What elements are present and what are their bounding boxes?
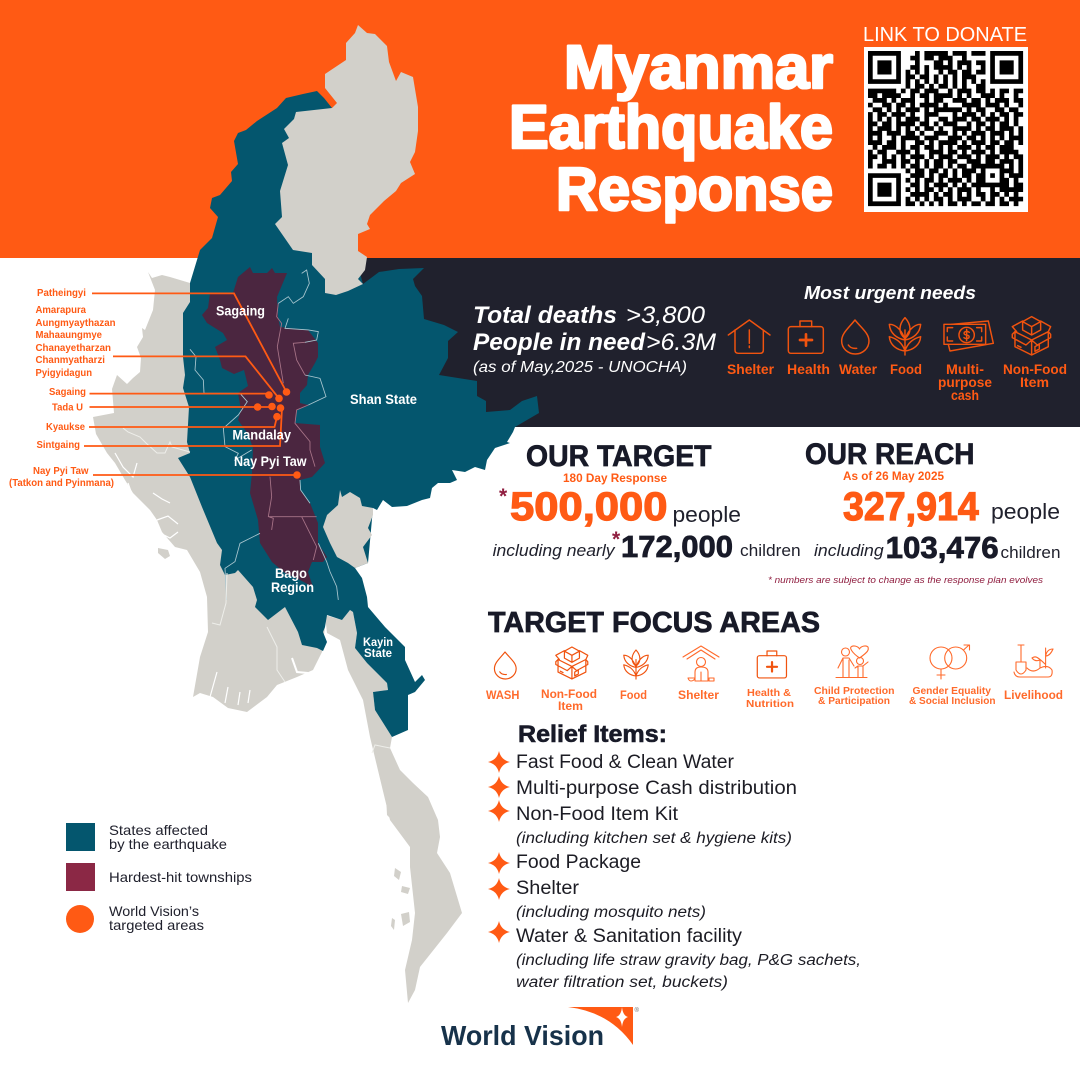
target heading: OUR TARGET bbox=[526, 440, 712, 473]
focus area labels: WASH bbox=[486, 690, 519, 702]
legend swatch: affected states bbox=[66, 823, 95, 851]
icon: food bbox=[889, 318, 921, 355]
reach people unit: people bbox=[991, 499, 1060, 524]
list text: Non-Food Item Kit bbox=[516, 804, 679, 825]
township labels: Aungmyaythazan bbox=[36, 318, 116, 329]
legend text: World Vision’s bbox=[109, 903, 199, 919]
focus area labels: Item bbox=[558, 701, 583, 713]
reach children unit: children bbox=[1000, 543, 1060, 562]
township labels: Chanayetharzan bbox=[36, 343, 111, 354]
panel: our target bbox=[493, 440, 801, 564]
township labels: Sagaing bbox=[49, 387, 86, 398]
region labels: Bago bbox=[275, 565, 307, 581]
focus area labels: & Participation bbox=[818, 696, 890, 707]
township labels: Chanmyatharzi bbox=[36, 355, 105, 366]
list text: Fast Food & Clean Water bbox=[516, 752, 735, 773]
QR code bbox=[864, 47, 1028, 212]
headline statistics: (as of May,2025 - UNOCHA) bbox=[473, 359, 687, 376]
headline statistics: Total deaths bbox=[473, 302, 617, 329]
orange header band bbox=[0, 0, 1080, 258]
map: southern peninsula bbox=[325, 610, 462, 1003]
township labels: Nay Pyi Taw bbox=[33, 466, 89, 477]
list text: water filtration set, buckets) bbox=[516, 974, 728, 991]
icon: shelter bbox=[728, 320, 770, 353]
target asterisk: * bbox=[499, 485, 508, 508]
map: western border lines bbox=[123, 428, 390, 753]
headline statistics: >6.3M bbox=[646, 329, 716, 356]
needs labels: Health bbox=[787, 362, 830, 377]
region labels: Kayin bbox=[363, 637, 393, 649]
needs heading: Most urgent needs bbox=[804, 283, 976, 303]
needs labels: Water bbox=[839, 362, 878, 377]
focus area labels: Nutrition bbox=[746, 698, 794, 710]
region labels: Mandalay bbox=[232, 426, 291, 442]
panel: our reach bbox=[805, 438, 1060, 565]
legend text: targeted areas bbox=[109, 917, 204, 933]
list text: Water & Sanitation facility bbox=[516, 926, 743, 947]
township labels: Amarapura bbox=[36, 305, 86, 316]
donate label: LINK TO DONATE bbox=[863, 24, 1027, 46]
icon: water bbox=[842, 320, 869, 354]
heading: target focus areas: TARGET FOCUS AREAS bbox=[488, 607, 820, 639]
target people unit: people bbox=[672, 502, 741, 527]
target subheading: 180 Day Response bbox=[563, 473, 667, 485]
list text: (including mosquito nets) bbox=[516, 904, 706, 921]
list text: (including life straw gravity bag, P&G sachets, bbox=[516, 952, 861, 969]
logo wordmark: World Vision bbox=[441, 1020, 604, 1051]
icon: focus shelter bbox=[683, 646, 719, 681]
focus area labels: Gender Equality bbox=[912, 686, 991, 697]
needs labels: Item bbox=[1020, 375, 1049, 390]
needs labels: cash bbox=[951, 388, 979, 403]
target children unit: children bbox=[740, 541, 801, 560]
panel: focus area icons bbox=[486, 645, 1063, 713]
map: northern Kachin state bbox=[275, 25, 418, 295]
region labels: State bbox=[364, 648, 392, 660]
logo star bbox=[616, 1007, 628, 1027]
focus area labels: Non-Food bbox=[541, 689, 597, 701]
headline statistics bbox=[473, 302, 716, 376]
township labels: (Tatkon and Pyinmana) bbox=[9, 478, 114, 489]
footnote: * numbers are subject to change as the response plan evolves bbox=[768, 575, 1043, 586]
target children asterisk: * bbox=[612, 528, 621, 551]
legend swatch: hardest-hit bbox=[66, 863, 95, 891]
focus area labels: Livelihood bbox=[1004, 690, 1063, 702]
icon: health bbox=[788, 321, 823, 353]
World Vision logo bbox=[441, 1007, 640, 1051]
region labels: Sagaing bbox=[216, 304, 265, 318]
needs labels: purpose bbox=[938, 375, 992, 390]
panel: relief items bbox=[488, 721, 861, 991]
headline statistics: >3,800 bbox=[626, 302, 706, 329]
reach heading: OUR REACH bbox=[805, 438, 974, 471]
township labels bbox=[9, 288, 116, 489]
needs labels: Non-Food bbox=[1003, 362, 1067, 377]
region labels: Nay Pyi Taw bbox=[234, 453, 307, 469]
township labels: Sintgaing bbox=[36, 440, 80, 451]
map of Myanmar bbox=[9, 25, 539, 1003]
icon: focus health bbox=[757, 651, 786, 678]
legend marker: targeted areas bbox=[66, 905, 94, 933]
needs labels: Food bbox=[890, 362, 922, 377]
township labels: Tada U bbox=[52, 402, 83, 414]
panel: most urgent needs bbox=[727, 283, 1067, 403]
icon: focus non-food item bbox=[556, 647, 588, 679]
headline statistics: People in need bbox=[473, 329, 646, 356]
region labels: Region bbox=[271, 579, 314, 595]
icon: livelihood bbox=[1014, 645, 1053, 677]
map: region boundary lines bbox=[190, 270, 338, 600]
needs labels: Multi- bbox=[946, 362, 984, 377]
reach children number: 103,476 bbox=[886, 530, 999, 565]
legend text: States affected bbox=[109, 822, 208, 838]
township labels: Pyigyidagun bbox=[36, 368, 92, 379]
icon: WASH bbox=[494, 652, 516, 679]
targeted area markers bbox=[254, 388, 301, 479]
map: eastern Kayah state bbox=[323, 490, 373, 568]
title: Response bbox=[556, 155, 833, 223]
icon: focus food bbox=[624, 650, 648, 679]
callout lines to townships bbox=[84, 293, 297, 475]
list bullets bbox=[488, 751, 510, 943]
list text: Food Package bbox=[516, 852, 641, 873]
list text bbox=[516, 752, 861, 991]
focus area labels: Child Protection bbox=[814, 686, 894, 697]
icon: multi-purpose cash bbox=[944, 321, 993, 351]
region labels: Shan State bbox=[350, 392, 417, 407]
target people number: 500,000 bbox=[510, 485, 668, 529]
township labels: Kyaukse bbox=[46, 422, 85, 433]
township labels: Mahaaungmye bbox=[36, 330, 102, 341]
focus area labels: & Social Inclusion bbox=[909, 696, 996, 707]
title bbox=[509, 33, 833, 223]
legend bbox=[66, 822, 252, 933]
target children number: 172,000 bbox=[621, 529, 733, 564]
map: southern strait bbox=[292, 658, 308, 673]
legend text: by the earthquake bbox=[109, 836, 227, 852]
map: hardest-hit townships bbox=[202, 267, 327, 587]
needs labels: Shelter bbox=[727, 362, 775, 377]
title: Myanmar bbox=[564, 33, 833, 101]
reach children prefix: including bbox=[814, 541, 884, 560]
logo swoosh bbox=[568, 1007, 633, 1045]
list text: Shelter bbox=[516, 878, 580, 899]
icon: gender equality bbox=[930, 645, 970, 679]
focus area labels bbox=[486, 686, 1063, 713]
logo registered mark: ® bbox=[634, 1007, 640, 1014]
legend text bbox=[109, 822, 252, 933]
icon: non-food item bbox=[1012, 317, 1051, 355]
list text: Multi-purpose Cash distribution bbox=[516, 778, 797, 799]
township labels: Patheingyi bbox=[37, 288, 86, 299]
target children prefix: including nearly bbox=[493, 541, 616, 560]
list text: (including kitchen set & hygiene kits) bbox=[516, 830, 792, 847]
icon: child protection bbox=[836, 646, 868, 678]
map: teal affected states bbox=[178, 91, 539, 737]
map: western coastal states bbox=[93, 272, 325, 712]
focus area labels: Health & bbox=[747, 687, 791, 699]
map: peninsula islands bbox=[158, 548, 410, 930]
focus area labels: Shelter bbox=[678, 690, 720, 702]
reach people number: 327,914 bbox=[843, 485, 979, 529]
dark statistics band bbox=[320, 258, 1080, 427]
focus area labels: Food bbox=[620, 690, 647, 702]
map: coastal inlets bbox=[115, 453, 250, 705]
title: Earthquake bbox=[509, 93, 833, 161]
relief heading: Relief Items: bbox=[518, 721, 667, 748]
legend text: Hardest-hit townships bbox=[109, 869, 252, 885]
reach date: As of 26 May 2025 bbox=[843, 471, 945, 483]
needs labels bbox=[727, 362, 1067, 403]
region labels bbox=[216, 304, 417, 660]
